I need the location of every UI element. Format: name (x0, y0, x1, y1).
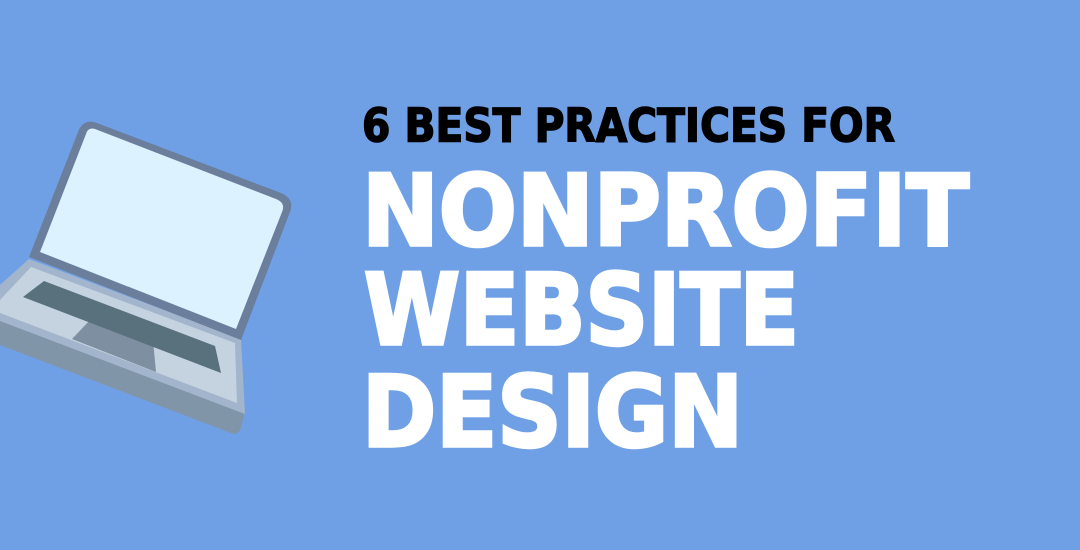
laptop base outer (0, 259, 245, 414)
laptop lid frame (29, 122, 291, 340)
laptop trackpad (72, 318, 156, 372)
laptop deck (0, 267, 237, 403)
laptop keyboard (23, 281, 221, 373)
laptop screen (40, 129, 283, 329)
title line: nonprofit: NONPROFIT (362, 155, 969, 269)
title line: website: WEBSITE (364, 254, 799, 368)
title line: design: DESIGN (362, 356, 743, 470)
subtitle: 6 BEST PRACTICES FOR (362, 98, 895, 152)
laptop front edge (0, 318, 245, 434)
icon: laptop (0, 122, 291, 434)
